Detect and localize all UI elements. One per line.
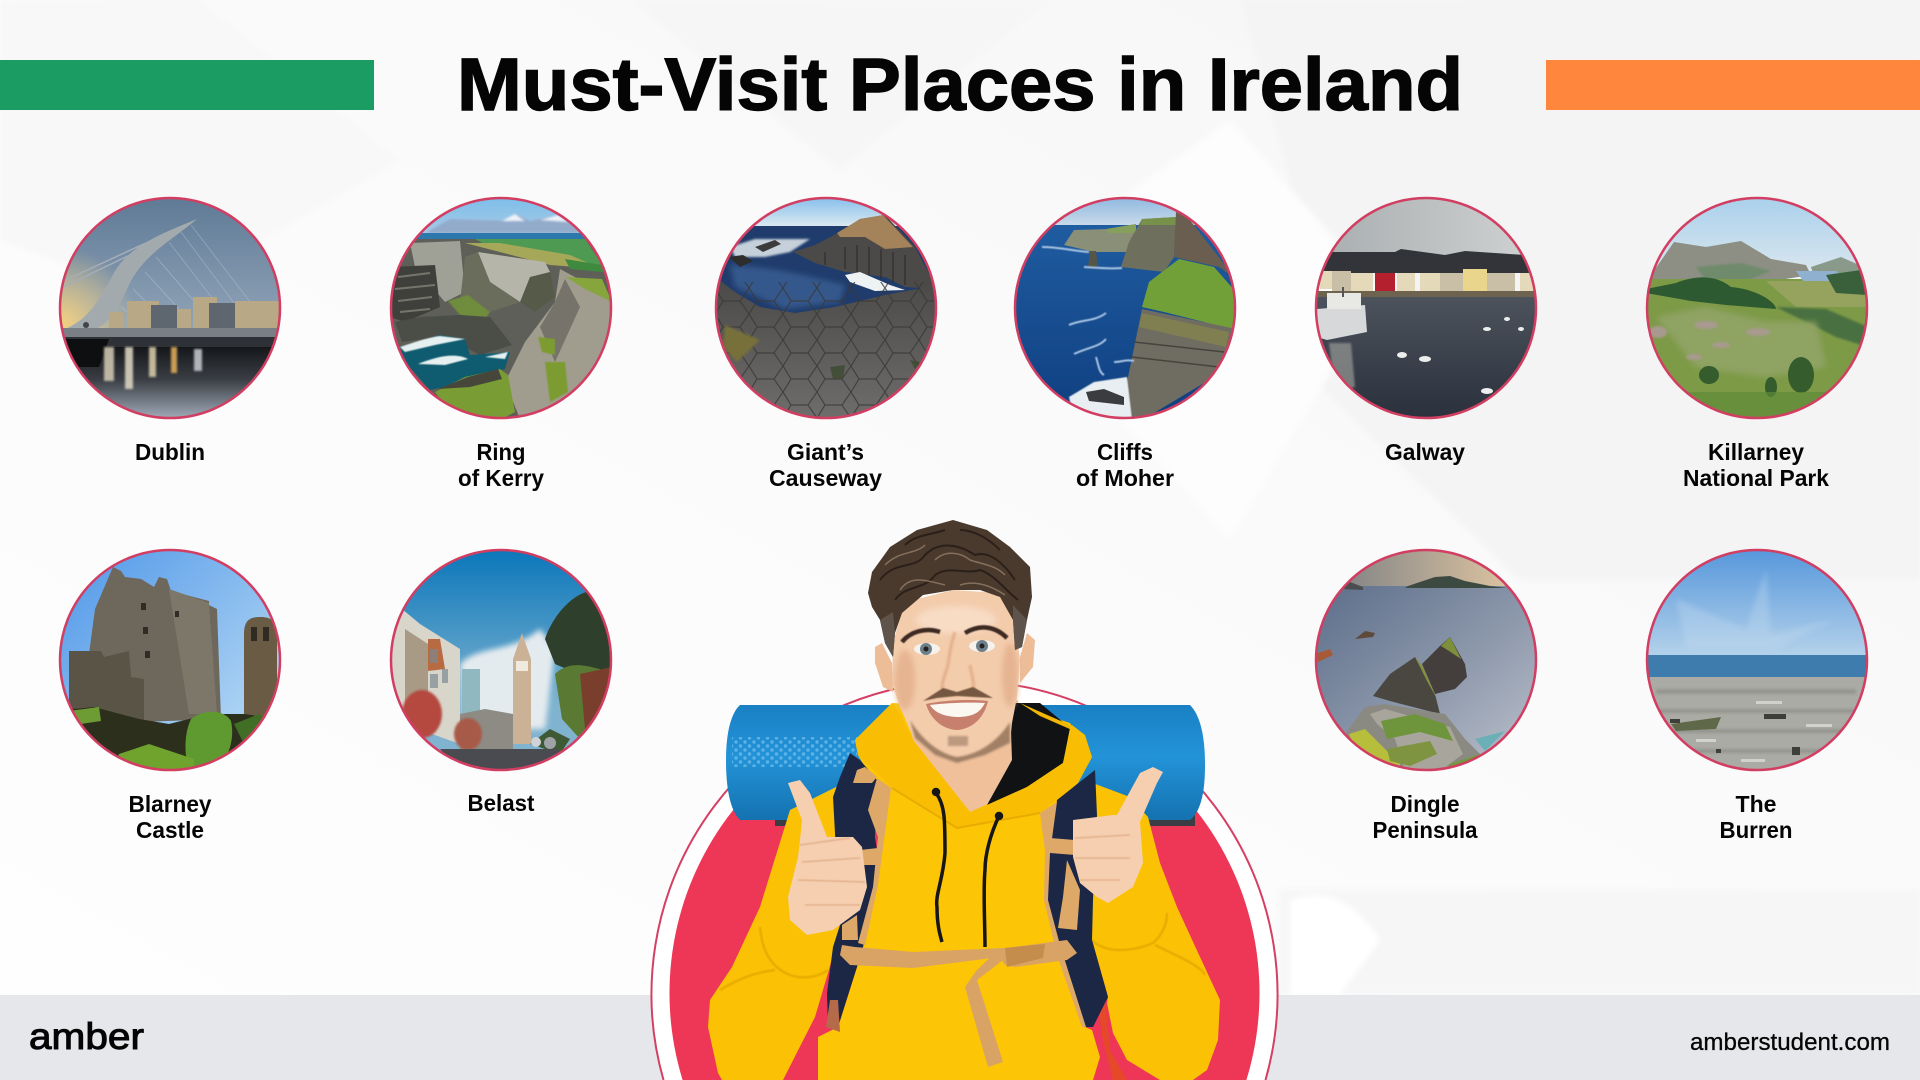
eyebrows xyxy=(902,627,1007,642)
label: Ring of Kerry: Ring xyxy=(476,439,526,465)
place: The Burren xyxy=(1646,549,1868,843)
photo: Dingle Peninsula xyxy=(1315,549,1537,771)
tan webbing xyxy=(826,767,1086,1032)
mouth xyxy=(926,700,988,730)
place: Blarney Castle: Castle xyxy=(136,817,204,843)
logo: amber: amber xyxy=(29,1016,144,1057)
label: Dingle Peninsula: Dingle xyxy=(1390,791,1460,817)
label: Belfast: Belast xyxy=(468,790,535,816)
eyes xyxy=(914,643,940,655)
hood xyxy=(855,703,1092,828)
place: Killarney National Park: National Park xyxy=(1683,465,1829,491)
label: Killarney National Park: Killarney xyxy=(1708,439,1804,465)
place: Belfast xyxy=(390,549,612,816)
place: The Burren: Burren xyxy=(1720,817,1792,843)
sleeve cuff shading xyxy=(720,913,1205,990)
place: Galway xyxy=(1315,197,1537,465)
backpack straps navy xyxy=(827,753,1108,1027)
place: Blarney Castle xyxy=(59,549,281,843)
hero: smiling backpacker xyxy=(708,520,1220,1080)
face xyxy=(892,590,1020,763)
place: Giant's Causeway: Causeway xyxy=(769,465,882,491)
photo: Galway harbour xyxy=(1315,197,1537,419)
place: Ring of Kerry xyxy=(390,197,612,491)
place: Cliffs of Moher xyxy=(1014,197,1236,491)
title: Must-Visit Places in Ireland xyxy=(457,43,1463,126)
neck xyxy=(905,700,1025,812)
nose xyxy=(942,632,974,692)
place: Giant's Causeway xyxy=(715,197,937,491)
place: Dingle Peninsula xyxy=(1315,549,1537,843)
label: Giant's Causeway: Giant’s xyxy=(787,439,864,465)
left hoodie sleeve xyxy=(708,786,850,1080)
drawstrings xyxy=(934,790,1002,947)
green bar xyxy=(0,60,374,110)
hoodie body xyxy=(818,703,1100,1080)
label: Dublin: Dublin xyxy=(135,439,205,465)
photo: Giant's Causeway rocks xyxy=(715,197,937,419)
label: Cliffs of Moher: Cliffs xyxy=(1097,439,1153,465)
label: Blarney Castle: Blarney xyxy=(128,791,212,817)
website: amberstudent.com: amberstudent.com xyxy=(1690,1029,1890,1056)
curly hair xyxy=(868,520,1032,657)
hero backdrop: red circle with outline ring xyxy=(652,681,1278,1080)
right hoodie sleeve xyxy=(1088,782,1220,1080)
place: Cliffs of Moher: of Moher xyxy=(1076,465,1174,491)
left thumbs-up hand xyxy=(788,780,867,935)
photo: The Burren xyxy=(1646,549,1868,771)
moustache xyxy=(923,687,993,701)
place: Dublin xyxy=(59,197,281,465)
chest strap and buckle xyxy=(840,940,1077,1067)
black inner hood xyxy=(987,703,1070,805)
photo: Killarney landscape xyxy=(1646,197,1868,419)
rolled blue mat xyxy=(726,705,1205,826)
label: Galway: Galway xyxy=(1385,439,1465,465)
label: The Burren: The xyxy=(1736,791,1776,817)
stubble beard xyxy=(910,720,1010,763)
right thumbs-up hand xyxy=(1073,767,1163,903)
place: Killarney National Park xyxy=(1646,197,1868,491)
footer band xyxy=(0,995,1920,1080)
photo: Belfast clock tower xyxy=(390,549,612,771)
photo: Blarney Castle xyxy=(59,549,281,771)
photo: Ring of Kerry cliffs xyxy=(390,197,612,419)
photo: Dublin bridge xyxy=(59,197,281,419)
place: Dingle Peninsula: Peninsula xyxy=(1372,817,1478,843)
photo: Cliffs of Moher xyxy=(1014,197,1236,419)
orange buckle strap xyxy=(1092,992,1127,1080)
ears xyxy=(875,633,1035,692)
place: Ring of Kerry: of Kerry xyxy=(458,465,544,491)
orange bar xyxy=(1546,60,1920,110)
